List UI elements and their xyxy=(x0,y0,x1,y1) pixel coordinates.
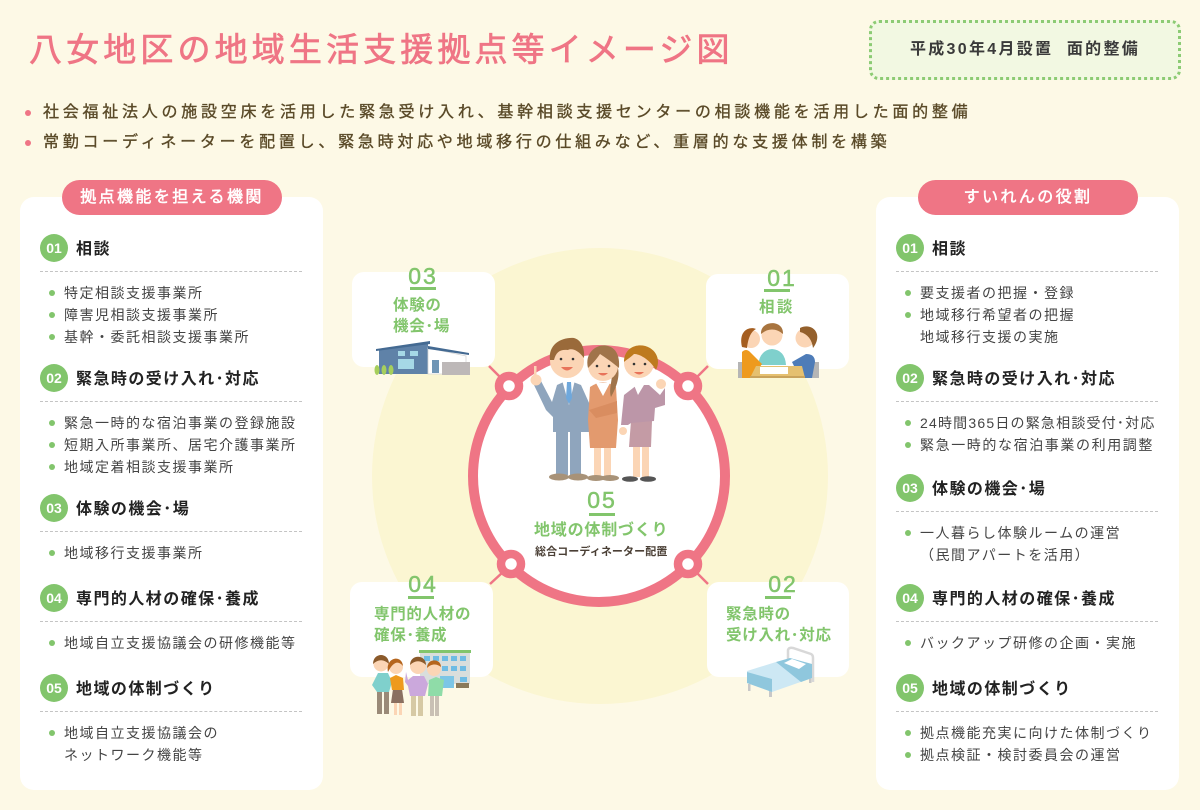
ring nodes xyxy=(499,376,698,574)
right section 01: 相談 xyxy=(932,241,967,258)
card 04 text xyxy=(374,606,471,644)
left section 04: 04 xyxy=(46,590,62,606)
center heading: 地域の体制づくり xyxy=(534,522,668,539)
card 02 text xyxy=(726,606,832,644)
badge: established date xyxy=(869,20,1181,80)
card 01: consultation xyxy=(706,274,849,369)
icon: bed xyxy=(747,648,813,697)
left section 04 xyxy=(40,584,302,651)
card 04 number: 04 xyxy=(408,571,438,597)
left section 03 xyxy=(40,494,302,561)
left section 05: 05 xyxy=(46,680,62,696)
left section 05 xyxy=(40,674,302,763)
left section 03: 03 xyxy=(46,500,62,516)
left section 02 xyxy=(40,364,302,475)
right section 02: 緊急一時的な宿泊事業の利用調整 xyxy=(920,437,1154,453)
left section 01: 基幹・委託相談支援事業所 xyxy=(64,329,250,345)
card 04 text: 確保･養成 xyxy=(374,627,447,644)
left section 03: 体験の機会･場 xyxy=(76,501,190,518)
right section 05: 05 xyxy=(902,680,918,696)
left section 01: 障害児相談支援事業所 xyxy=(64,307,219,323)
panel: left institutions xyxy=(20,197,323,790)
center underline xyxy=(589,513,615,516)
badge: established date: 平成30年4月設置 面的整備 xyxy=(910,41,1140,58)
card 03 number: 03 xyxy=(408,263,438,289)
right section 03 xyxy=(896,474,1158,563)
right section 02: 24時間365日の緊急相談受付･対応 xyxy=(920,415,1156,431)
center subtext: 総合コーディネーター配置 xyxy=(535,546,667,558)
right section 03: 体験の機会･場 xyxy=(932,481,1046,498)
right section 04: バックアップ研修の企画・実施 xyxy=(920,635,1137,651)
right section 01: 01 xyxy=(902,240,918,256)
right panel heading: すいれんの役割 xyxy=(964,189,1092,206)
right section 02 xyxy=(896,364,1158,453)
right section 03: 一人暮らし体験ルームの運営 xyxy=(920,525,1121,541)
left section 01 xyxy=(40,234,302,345)
card 01 number: 01 xyxy=(767,265,797,291)
card 01 text: 相談 xyxy=(759,299,795,316)
left section 05: 地域の体制づくり xyxy=(76,681,216,698)
left section 02: 地域定着相談支援事業所 xyxy=(64,459,234,475)
card 02: emergency xyxy=(707,582,849,677)
central ring xyxy=(473,350,725,602)
icon: facility building xyxy=(374,341,470,375)
card 02 number: 02 xyxy=(768,571,798,597)
background circle xyxy=(372,248,828,704)
right section 04 xyxy=(896,584,1158,651)
left section 05: ネットワーク機能等 xyxy=(64,747,204,763)
woman right xyxy=(619,345,666,482)
right section 01: 要支援者の把握・登録 xyxy=(920,285,1075,301)
left section 02: 02 xyxy=(46,370,62,386)
card 03 text: 体験の xyxy=(393,297,442,314)
left section 02: 緊急時の受け入れ･対応 xyxy=(76,371,260,388)
left section 01: 01 xyxy=(46,240,62,256)
right section 03: （民間アパートを活用） xyxy=(920,547,1090,563)
title: 八女地区の地域生活支援拠点等イメージ図 xyxy=(29,31,734,68)
right section 03: 03 xyxy=(902,480,918,496)
card 02 text: 緊急時の xyxy=(726,606,791,623)
right section 05: 地域の体制づくり xyxy=(932,681,1072,698)
right panel heading xyxy=(918,180,1138,215)
icon: consultation meeting xyxy=(738,323,819,378)
right section 05: 拠点機能充実に向けた体制づくり xyxy=(920,725,1152,741)
card 03 text: 機会･場 xyxy=(393,318,450,335)
icon: three staff members xyxy=(530,338,666,482)
right section 01: 地域移行支援の実施 xyxy=(920,329,1060,345)
left section 04: 専門的人材の確保･養成 xyxy=(76,591,260,608)
card 04: personnel xyxy=(350,582,493,677)
right section 02: 緊急時の受け入れ･対応 xyxy=(932,371,1116,388)
right section 05 xyxy=(896,674,1158,763)
panel: right suiren roles xyxy=(876,197,1179,790)
card 03: experience xyxy=(352,272,495,367)
left section 01: 特定相談支援事業所 xyxy=(64,285,204,301)
card 01 underline xyxy=(764,289,790,292)
left section 03: 地域移行支援事業所 xyxy=(64,545,204,561)
card 02 text: 受け入れ･対応 xyxy=(726,627,832,644)
right section 01 xyxy=(896,234,1158,345)
right section 04: 専門的人材の確保･養成 xyxy=(932,591,1116,608)
right section 02: 02 xyxy=(902,370,918,386)
left section 01: 相談 xyxy=(76,241,111,258)
lead bullet 2: 常勤コーディネーターを配置し、緊急時対応や地域移行の仕組みなど、重層的な支援体制を構築 xyxy=(43,134,890,151)
man xyxy=(530,338,590,480)
lead bullet 1: 社会福祉法人の施設空床を活用した緊急受け入れ、基幹相談支援センターの相談機能を活用した面的整備 xyxy=(43,104,971,121)
card 04 underline xyxy=(408,596,434,598)
card 03 underline xyxy=(410,287,436,290)
left panel heading xyxy=(62,180,282,215)
left section 02: 短期入所事業所、居宅介護事業所 xyxy=(64,437,296,453)
card 02 underline xyxy=(765,596,791,598)
right section 05: 拠点検証・検討委員会の運営 xyxy=(920,747,1122,763)
card 03 text xyxy=(393,296,450,335)
right section 04: 04 xyxy=(902,590,918,606)
connector lines xyxy=(489,366,708,584)
left section 05: 地域自立支援協議会の xyxy=(64,725,219,741)
left section 02: 緊急一時的な宿泊事業の登録施設 xyxy=(64,415,296,431)
left panel heading: 拠点機能を担える機関 xyxy=(80,189,264,206)
woman center xyxy=(587,345,619,481)
icon: group of people and apartment xyxy=(372,650,471,716)
card 04 text: 専門的人材の xyxy=(374,606,471,623)
right section 01: 地域移行希望者の把握 xyxy=(920,307,1075,323)
left section 04: 地域自立支援協議会の研修機能等 xyxy=(64,635,296,651)
center number 05: 05 xyxy=(587,487,617,513)
